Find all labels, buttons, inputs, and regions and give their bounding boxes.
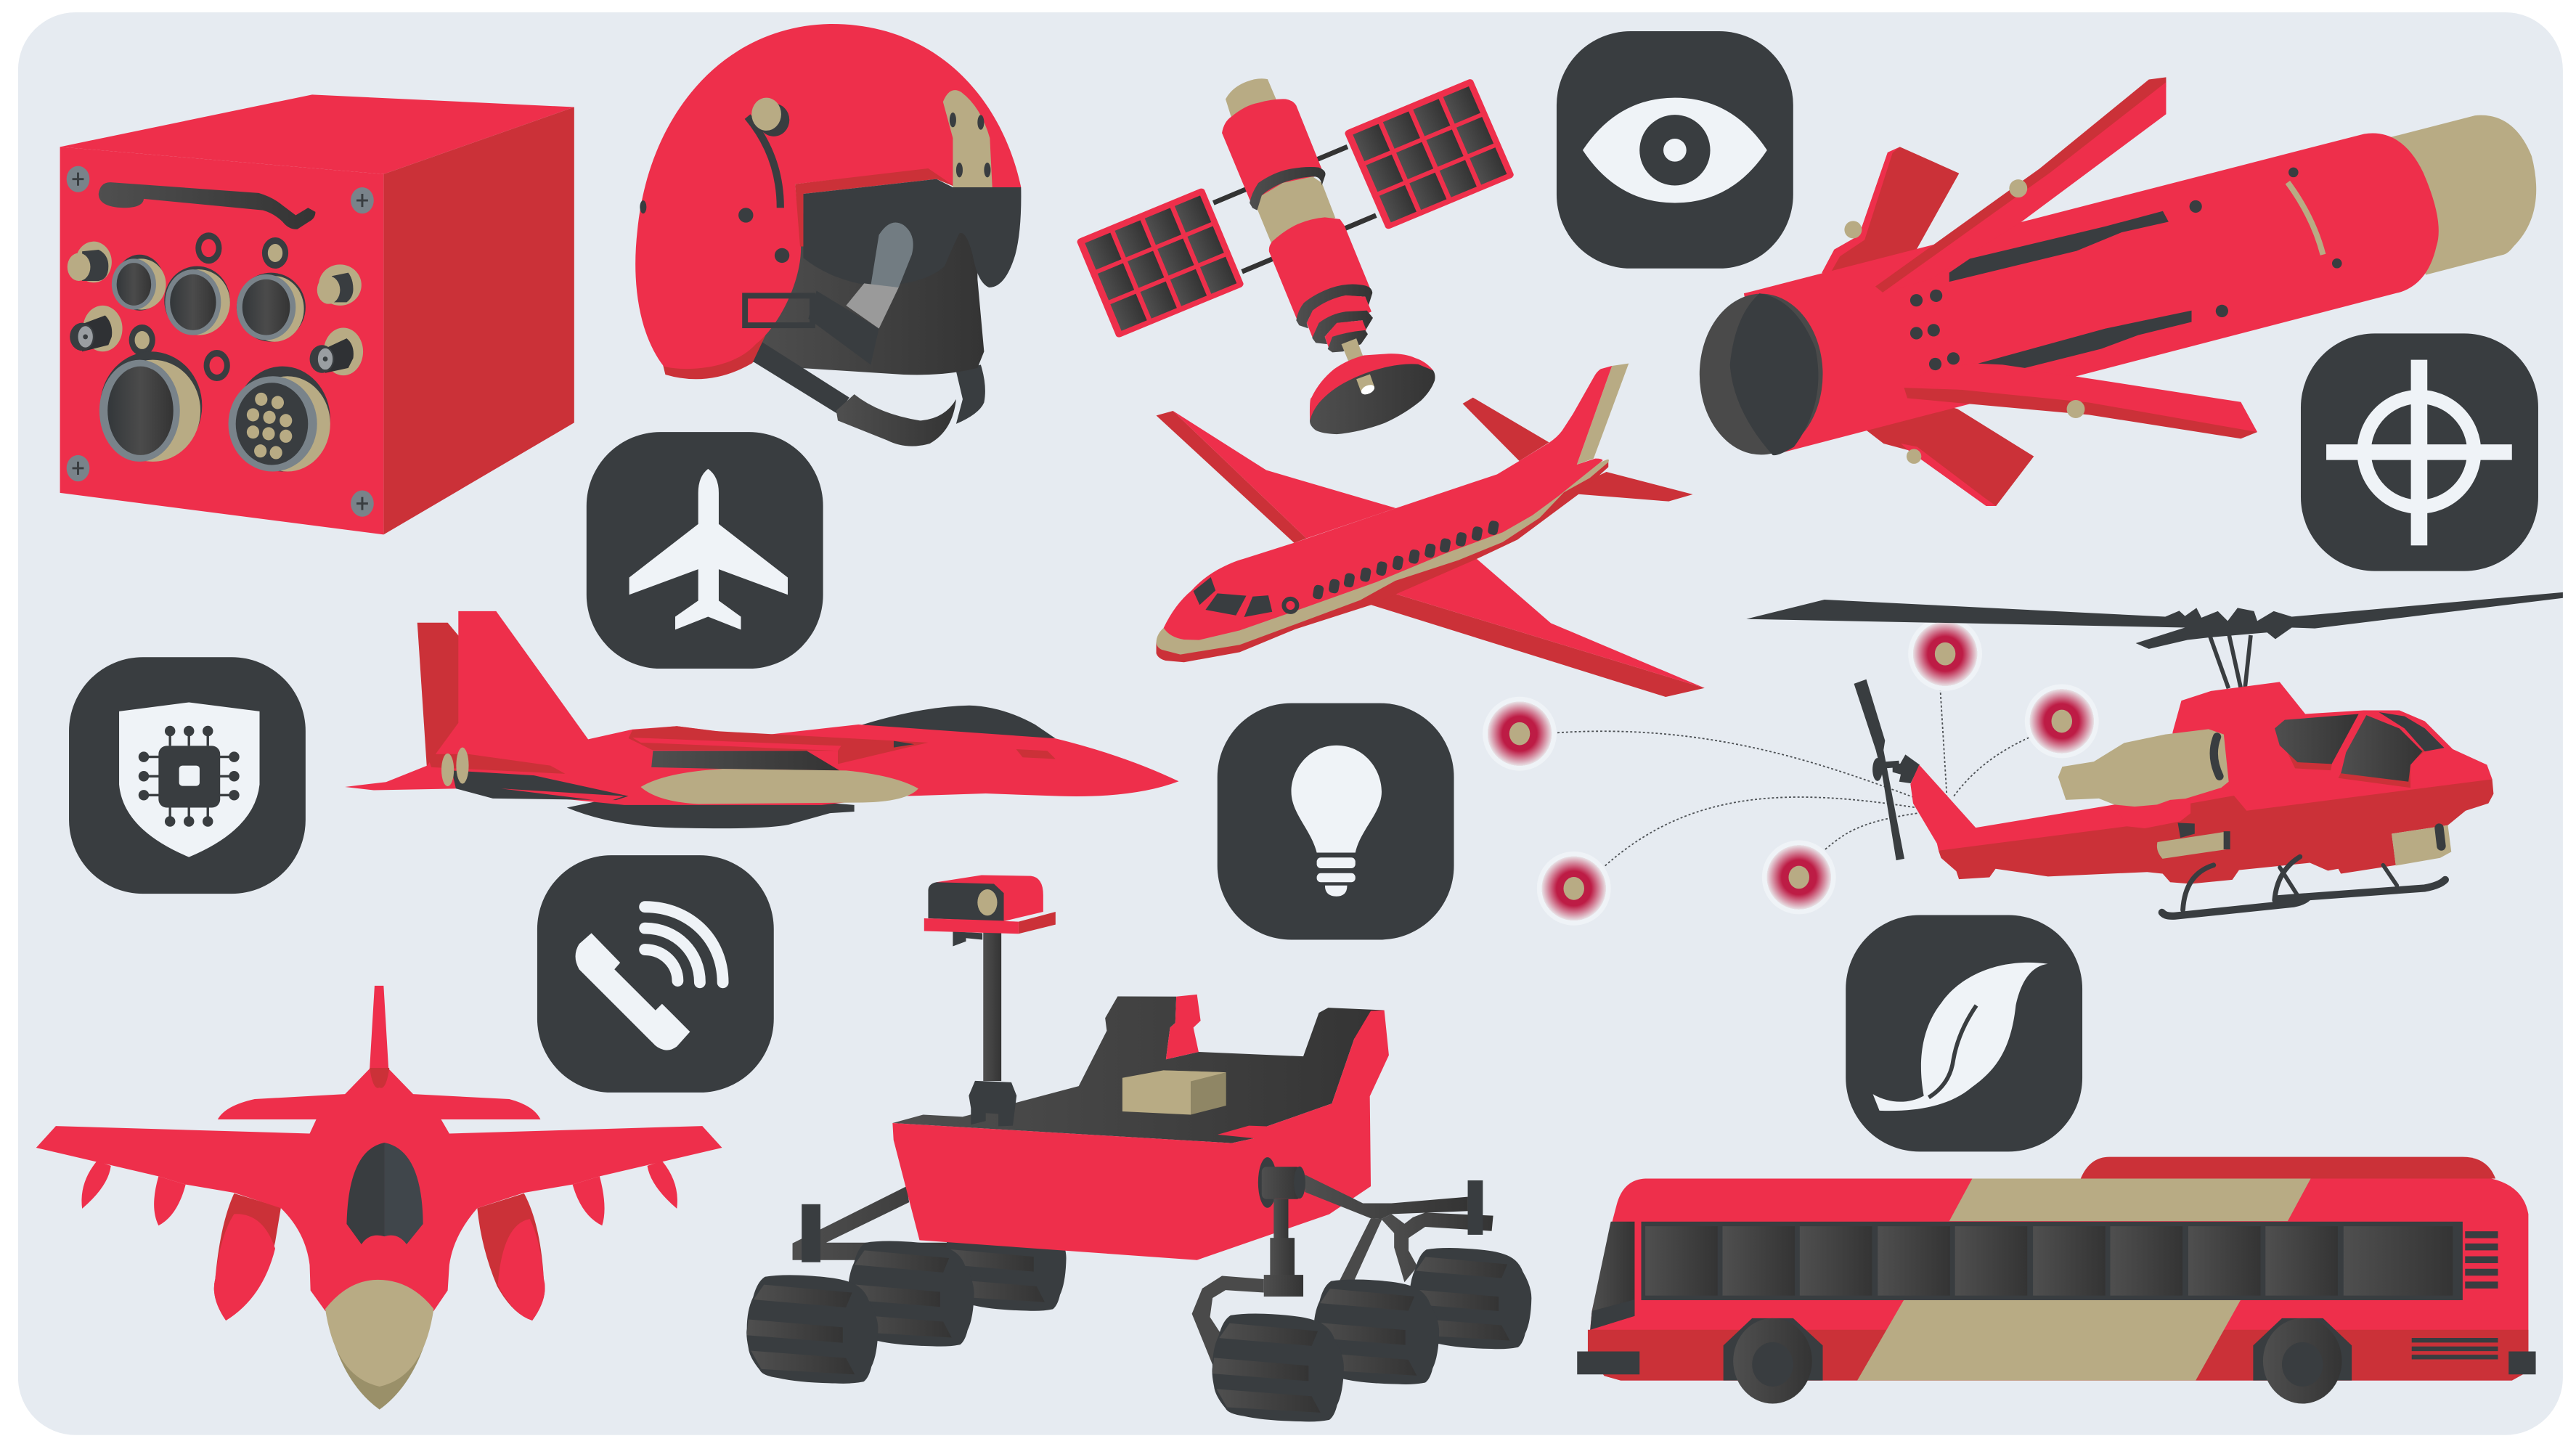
- satellite rings: [1296, 284, 1372, 328]
- rover: [746, 875, 1531, 1421]
- fuselage: [1164, 366, 1612, 640]
- side-view fighter jet: [345, 611, 1179, 828]
- fuselage tan stripe: [1157, 460, 1609, 655]
- tail rotor: [1854, 679, 1904, 860]
- bus: [1577, 1157, 2536, 1404]
- satellite dish: [1310, 354, 1433, 420]
- rover deck: [892, 997, 1384, 1143]
- gun: [2178, 823, 2195, 838]
- helmet: [635, 24, 1021, 446]
- icon: shield with chip: [69, 657, 306, 894]
- rover mast: [924, 875, 1056, 1127]
- helmet interior: [748, 213, 984, 375]
- fuselage underside: [1157, 462, 1608, 662]
- satellite: [1076, 78, 1515, 434]
- icon: eye: [1557, 31, 1793, 269]
- airliner: [1157, 364, 1705, 697]
- icon: lightbulb: [1218, 703, 1454, 939]
- chin turret: [2392, 825, 2451, 865]
- helicopter target trails: [1557, 688, 2029, 866]
- bus vents: [2465, 1235, 2498, 1285]
- rover back wheels: [945, 1207, 1067, 1311]
- skids: [2162, 857, 2445, 916]
- rover right suspension: [1192, 1157, 1493, 1364]
- cockpit windows: [2278, 723, 2339, 770]
- target markers: [1483, 617, 2099, 926]
- airliner windows: [1194, 520, 1499, 617]
- rover body: [892, 1011, 1389, 1260]
- fuselage: [1910, 682, 2493, 854]
- icon: leaf: [1846, 915, 2082, 1151]
- bus wheels: [1724, 1318, 1823, 1381]
- icon: airplane: [587, 432, 823, 669]
- rover front wheels: [1409, 1248, 1531, 1349]
- missile front opening: [1700, 294, 1823, 454]
- icon: crosshair target: [2301, 333, 2538, 571]
- front-view fighter jet: [36, 986, 722, 1410]
- missile tail: [2389, 115, 2536, 275]
- main rotor: [1746, 592, 2563, 649]
- avionics box: [60, 94, 574, 534]
- rover crate: [1122, 1070, 1226, 1114]
- bus windshield: [1590, 1222, 1634, 1330]
- icon: phone signal: [537, 855, 774, 1093]
- bus windows: [1641, 1222, 2463, 1300]
- solar panel left: [1076, 187, 1244, 338]
- solar panel right: [1344, 78, 1515, 230]
- engine: [2058, 729, 2229, 807]
- helicopter: [1746, 592, 2563, 916]
- rover left suspension: [793, 1186, 986, 1260]
- missile: [1700, 77, 2536, 506]
